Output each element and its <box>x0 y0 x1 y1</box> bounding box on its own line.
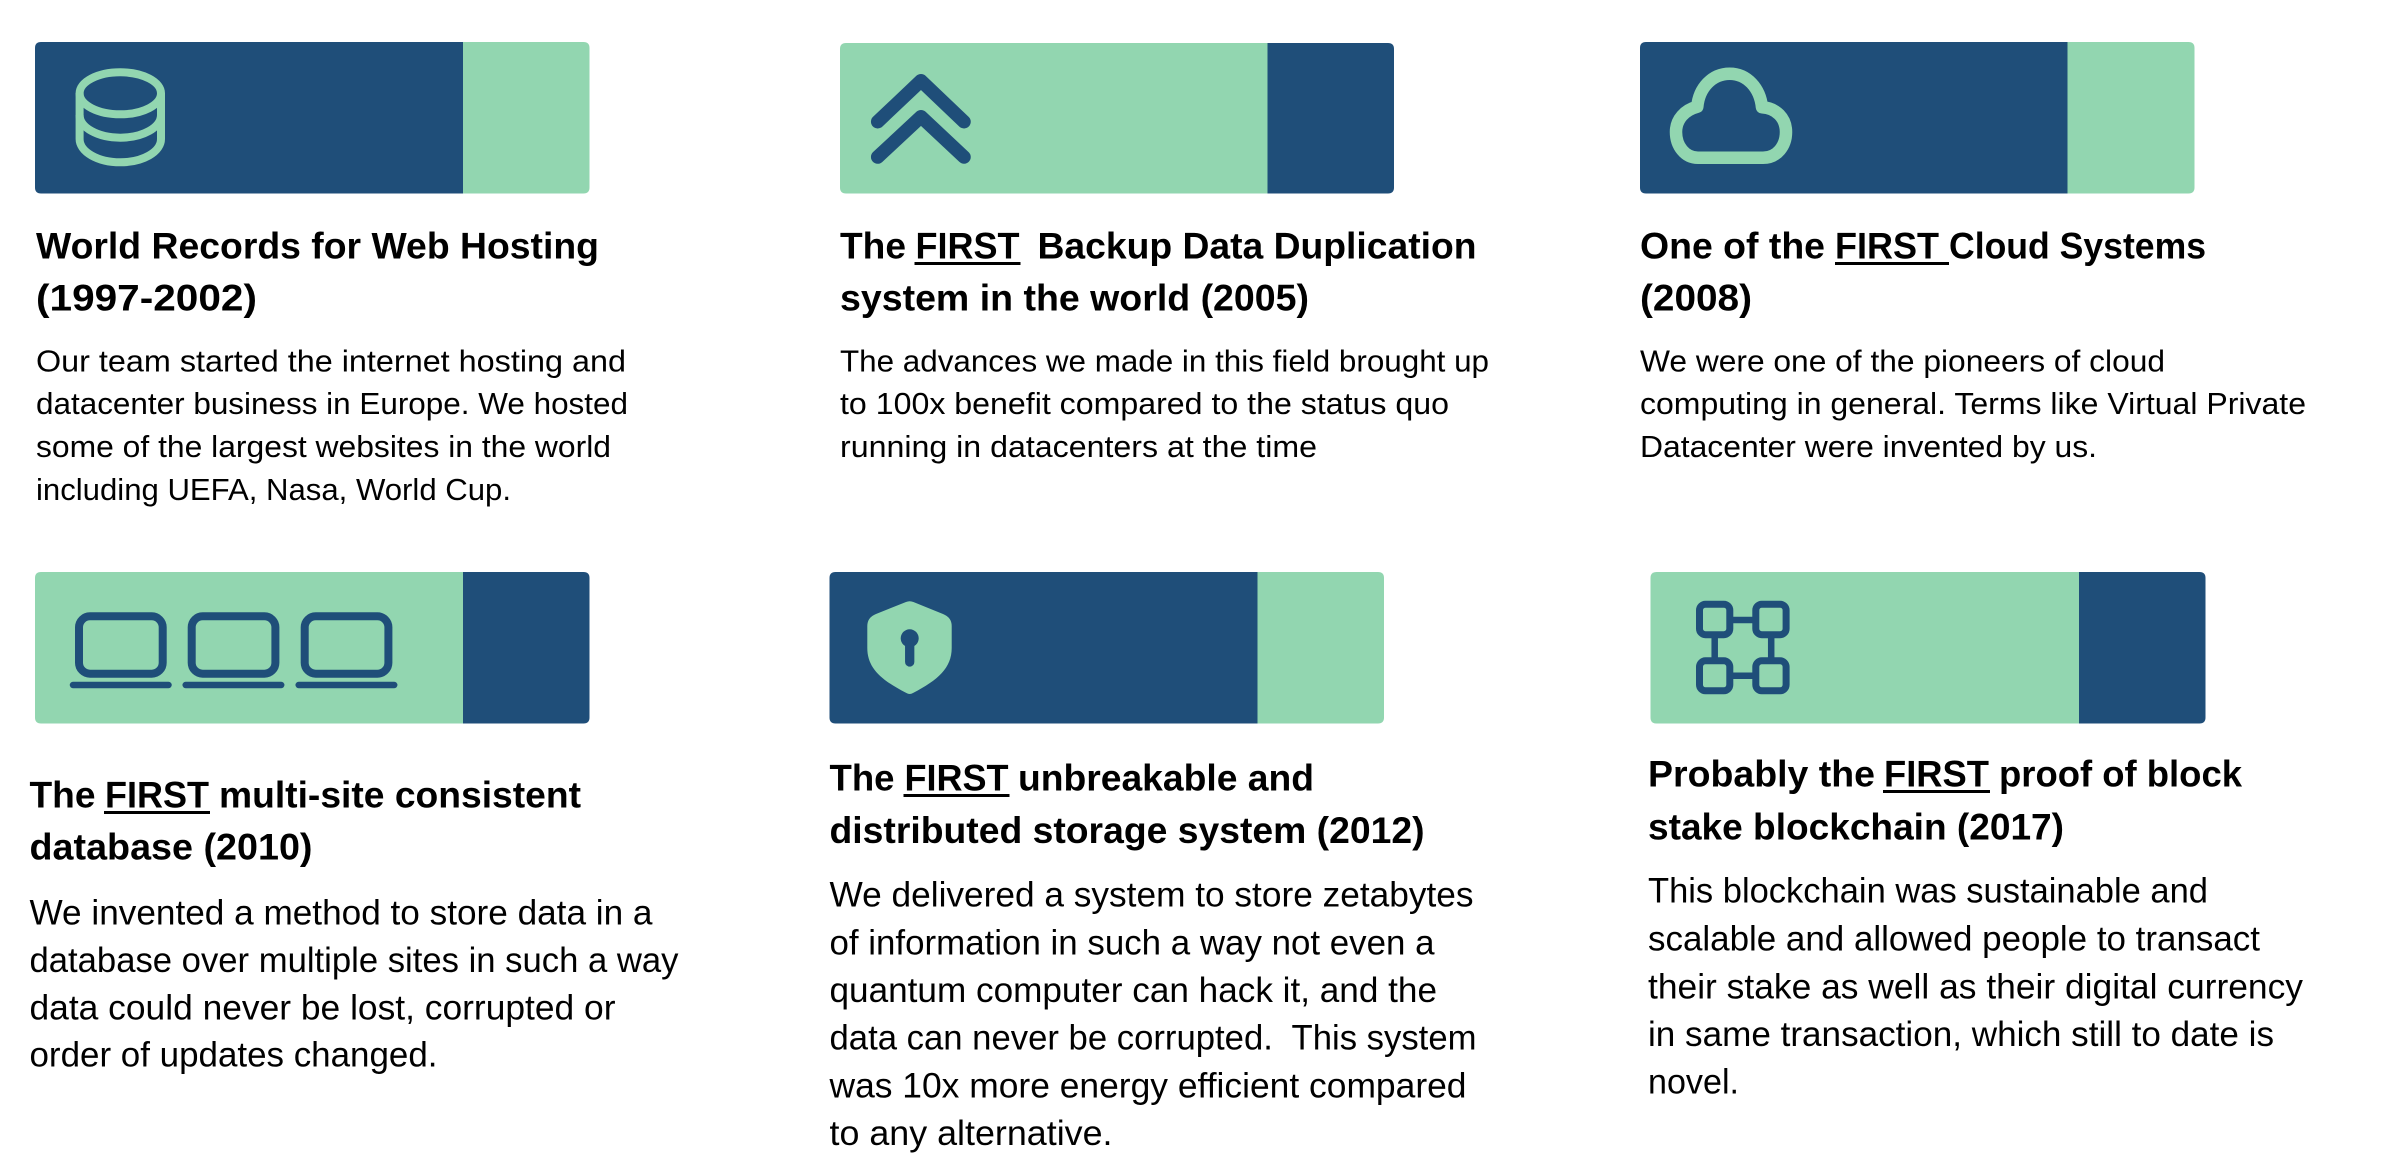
heading: system in the world (2005) <box>840 278 1309 318</box>
text block <box>1648 872 2303 1102</box>
text block: running in datacenters at the time <box>840 429 1317 464</box>
icon: database <box>80 72 161 162</box>
heading <box>1648 754 2242 848</box>
text block: datacenter business in Europe. We hosted <box>36 386 628 421</box>
heading: World Records for Web Hosting <box>36 226 599 266</box>
heading: proof of block <box>1999 754 2242 794</box>
text block: Datacenter were invented by us. <box>1640 429 2097 464</box>
text block: data can never be corrupted. This system <box>830 1018 1476 1058</box>
banner: navy and green <box>1640 42 2194 194</box>
panel: unbreakable distributed storage <box>828 572 1476 1153</box>
text block: was 10x more energy efficient compared <box>828 1066 1466 1106</box>
banner: navy and green <box>830 572 1384 724</box>
heading: unbreakable and <box>1018 758 1314 798</box>
heading <box>36 226 599 318</box>
heading: The <box>30 774 96 816</box>
heading: The <box>840 226 906 266</box>
banner: navy and green <box>35 42 590 194</box>
text block: This blockchain was sustainable and <box>1648 872 2208 910</box>
text block: order of updates changed. <box>30 1036 438 1074</box>
heading: FIRST <box>1884 754 1989 794</box>
text block: Our team started the internet hosting and <box>36 344 626 378</box>
text block <box>36 344 628 507</box>
heading: Backup Data Duplication <box>1038 226 1476 266</box>
text block: database over multiple sites in such a way <box>30 941 679 980</box>
heading <box>1640 226 2206 318</box>
text block: to any alternative. <box>830 1114 1112 1153</box>
panel: world records for web hosting <box>35 42 628 507</box>
heading: FIRST <box>916 226 1020 266</box>
icon: cloud <box>1676 74 1786 158</box>
icon: double chevron up <box>878 81 964 157</box>
text block: novel. <box>1648 1062 1739 1102</box>
banner: green and navy <box>840 43 1394 194</box>
text block <box>828 876 1476 1153</box>
text block: some of the largest websites in the world <box>36 429 611 464</box>
text block: including UEFA, Nasa, World Cup. <box>36 472 511 507</box>
heading: FIRST <box>904 758 1009 798</box>
panel: multi-site consistent database <box>30 572 679 1074</box>
icon: three laptops <box>73 616 394 685</box>
heading: database (2010) <box>30 826 312 868</box>
text block: We invented a method to store data in a <box>30 894 653 932</box>
banner: green and navy <box>35 572 590 724</box>
text block <box>1640 344 2306 464</box>
text block: We were one of the pioneers of cloud <box>1640 344 2165 378</box>
heading: Probably the <box>1648 754 1875 794</box>
heading <box>830 758 1424 851</box>
text block: in same transaction, which still to date is <box>1648 1015 2274 1054</box>
text block: scalable and allowed people to transact <box>1648 920 2260 958</box>
heading: FIRST <box>1835 226 1939 266</box>
text block: We delivered a system to store zetabytes <box>830 876 1474 914</box>
icon: blockchain nodes <box>1700 604 1786 691</box>
heading: (1997-2002) <box>36 278 257 318</box>
text block: to 100x benefit compared to the status quo <box>840 386 1449 421</box>
icon: shield with keyhole <box>867 601 952 694</box>
text block: computing in general. Terms like Virtual Private <box>1640 386 2306 421</box>
text block: The advances we made in this field brought up <box>840 344 1489 378</box>
heading: The <box>830 758 894 798</box>
heading: stake blockchain (2017) <box>1648 806 2064 848</box>
text block: quantum computer can hack it, and the <box>830 971 1437 1010</box>
panel: cloud systems <box>1640 42 2306 464</box>
text block: their stake as well as their digital currency <box>1648 968 2303 1006</box>
text block: data could never be lost, corrupted or <box>30 988 616 1028</box>
heading: (2008) <box>1640 278 1752 318</box>
heading: multi-site consistent <box>219 774 581 816</box>
heading <box>840 226 1476 318</box>
panel: proof of block stake blockchain <box>1648 572 2303 1102</box>
heading: distributed storage system (2012) <box>830 810 1424 851</box>
text block <box>30 894 679 1074</box>
heading <box>30 774 581 868</box>
banner: green and navy <box>1650 572 2206 724</box>
panel: backup data duplication <box>840 43 1489 464</box>
heading: Cloud Systems <box>1949 226 2206 266</box>
heading: One of the <box>1640 226 1825 266</box>
heading: FIRST <box>105 774 209 816</box>
text block <box>840 344 1489 464</box>
text block: of information in such a way not even a <box>830 924 1435 962</box>
